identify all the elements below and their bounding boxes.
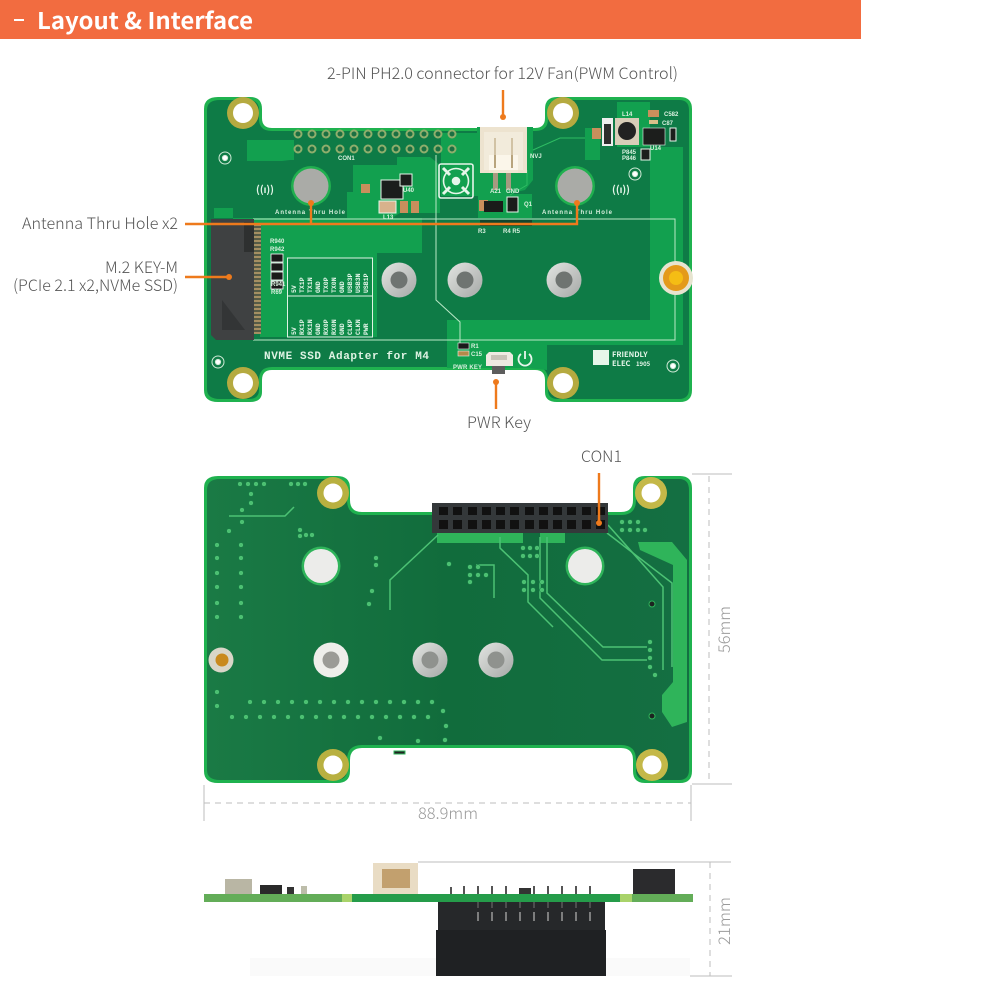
pin table silkscreen: TX0N [331, 277, 338, 293]
antenna thru holes: Antenna Thru Hole [275, 210, 346, 216]
connector stud [208, 648, 234, 672]
pin table silkscreen: GND [315, 323, 322, 335]
antenna leader line [185, 200, 580, 224]
silkscreen outline [253, 138, 675, 345]
CON1 leader line [596, 473, 602, 526]
fan leader line [500, 90, 506, 120]
small SMD components: C582 [664, 112, 679, 118]
fan connector: GND [506, 189, 520, 195]
pin table silkscreen: USB3P [347, 273, 354, 293]
shadow [250, 958, 690, 976]
height dimension 21mm: 21mm [711, 897, 735, 945]
label: M.2 key-M [13, 254, 178, 296]
pin table silkscreen: R940 [270, 239, 285, 245]
CON1 header [432, 503, 608, 533]
small SMD components: U14 [650, 146, 662, 152]
M.2 leader line [185, 274, 232, 280]
pin table silkscreen: TX0P [323, 277, 330, 293]
power icon [518, 351, 532, 366]
pin table silkscreen: CLKP [347, 319, 354, 335]
bottom view PCB board [204, 476, 692, 783]
GPIO through-hole pins [294, 130, 456, 152]
antenna thru holes: ((ı)) [256, 181, 274, 196]
small SMD components: L13 [383, 215, 394, 221]
header banner: Layout & Interface [37, 2, 253, 36]
side view of board [204, 863, 693, 976]
pin table silkscreen: RX0N [331, 319, 338, 335]
fan silkscreen icon [439, 164, 473, 198]
silver standoffs [314, 642, 514, 678]
board markings: FRIENDLY [612, 349, 648, 360]
board markings: C15 [471, 352, 483, 358]
pin table silkscreen: RX1P [299, 319, 306, 335]
fan connector: NVJ [530, 154, 542, 160]
small SMD components: P846 [622, 156, 637, 162]
antenna holes [302, 546, 604, 586]
height dimension 56mm [692, 474, 735, 784]
power key switch [486, 352, 513, 374]
small SMD components: L14 [622, 112, 633, 118]
fan connector [480, 127, 542, 195]
pin table silkscreen: GND [315, 281, 322, 293]
height dimension 56mm: 56mm [711, 606, 735, 653]
side components [225, 863, 675, 894]
black test points [394, 601, 655, 754]
label: M.2 key-M: M.2 KEY-M [105, 254, 178, 278]
header body [436, 902, 606, 976]
small SMD components: C87 [662, 121, 674, 127]
board edge [204, 894, 693, 902]
pin table silkscreen: RX0P [323, 319, 330, 335]
header banner [0, 0, 861, 39]
label: PWR key: PWR Key [467, 409, 531, 433]
pin table silkscreen: R69 [271, 290, 283, 296]
label: antenna thru hole: Antenna Thru Hole x2 [22, 210, 178, 234]
small SMD components: P845 [622, 150, 637, 156]
silver standoffs [382, 262, 582, 298]
small SMD components: U40 [403, 188, 415, 194]
width dimension 88.9mm [204, 785, 691, 824]
fan connector: A21 [490, 189, 502, 195]
PWR key leader line [493, 379, 499, 409]
pin table silkscreen [270, 239, 372, 337]
antenna thru holes [256, 166, 630, 216]
label: fan connector: 2-PIN PH2.0 connector for 12V Fan(PWM Control) [327, 60, 678, 84]
pin table silkscreen: TX1P [299, 277, 306, 293]
small fiducial rings [212, 152, 679, 372]
copper fill zones [233, 102, 683, 370]
traces [229, 507, 672, 670]
pin table silkscreen: 5V [291, 285, 298, 293]
label: CON1: CON1 [581, 443, 622, 467]
pin table silkscreen: USB3N [355, 273, 362, 293]
pin table silkscreen: PWR [363, 323, 370, 335]
label: M.2 key-M: (PCIe 2.1 x2,NVMe SSD) [13, 272, 178, 296]
board markings: NVME SSD Adapter for M4 [264, 351, 429, 363]
board markings: 1905 [636, 359, 651, 368]
board markings: PWR KEY [453, 365, 482, 371]
width dimension 88.9mm: 88.9mm [418, 800, 478, 824]
pin table silkscreen: GND [339, 281, 346, 293]
small SMD components: R3 [478, 229, 486, 235]
mounting holes [317, 477, 668, 781]
antenna thru holes: Antenna Thru Hole [542, 210, 613, 216]
board markings: CON1 [338, 156, 355, 162]
pin table silkscreen: GND [339, 323, 346, 335]
antenna thru holes: ((ı)) [612, 181, 630, 196]
board markings: R1 [471, 344, 479, 350]
M.2 KEY-M slot [211, 208, 261, 340]
pin table silkscreen: TX1N [307, 277, 314, 293]
copper polygon [638, 542, 687, 727]
small SMD components: R4 R5 [503, 229, 521, 235]
pin table silkscreen: 5V [291, 327, 298, 335]
gold antenna connector [659, 261, 693, 295]
pin table silkscreen: R942 [270, 247, 285, 253]
vias [215, 482, 657, 743]
connector base pad [437, 533, 565, 543]
4 mounting holes [227, 97, 579, 399]
pin table silkscreen: CLKN [355, 319, 362, 335]
board markings: ELEC [612, 358, 631, 369]
small SMD components: Q1 [524, 202, 533, 208]
top view PCB board [204, 97, 693, 402]
board markings [264, 156, 651, 371]
pin table silkscreen: R941 [271, 282, 286, 288]
height dimension 21mm [418, 862, 735, 976]
pin table silkscreen: RX1N [307, 319, 314, 335]
small SMD components [361, 110, 679, 235]
pin table silkscreen: USB1P [363, 273, 370, 293]
